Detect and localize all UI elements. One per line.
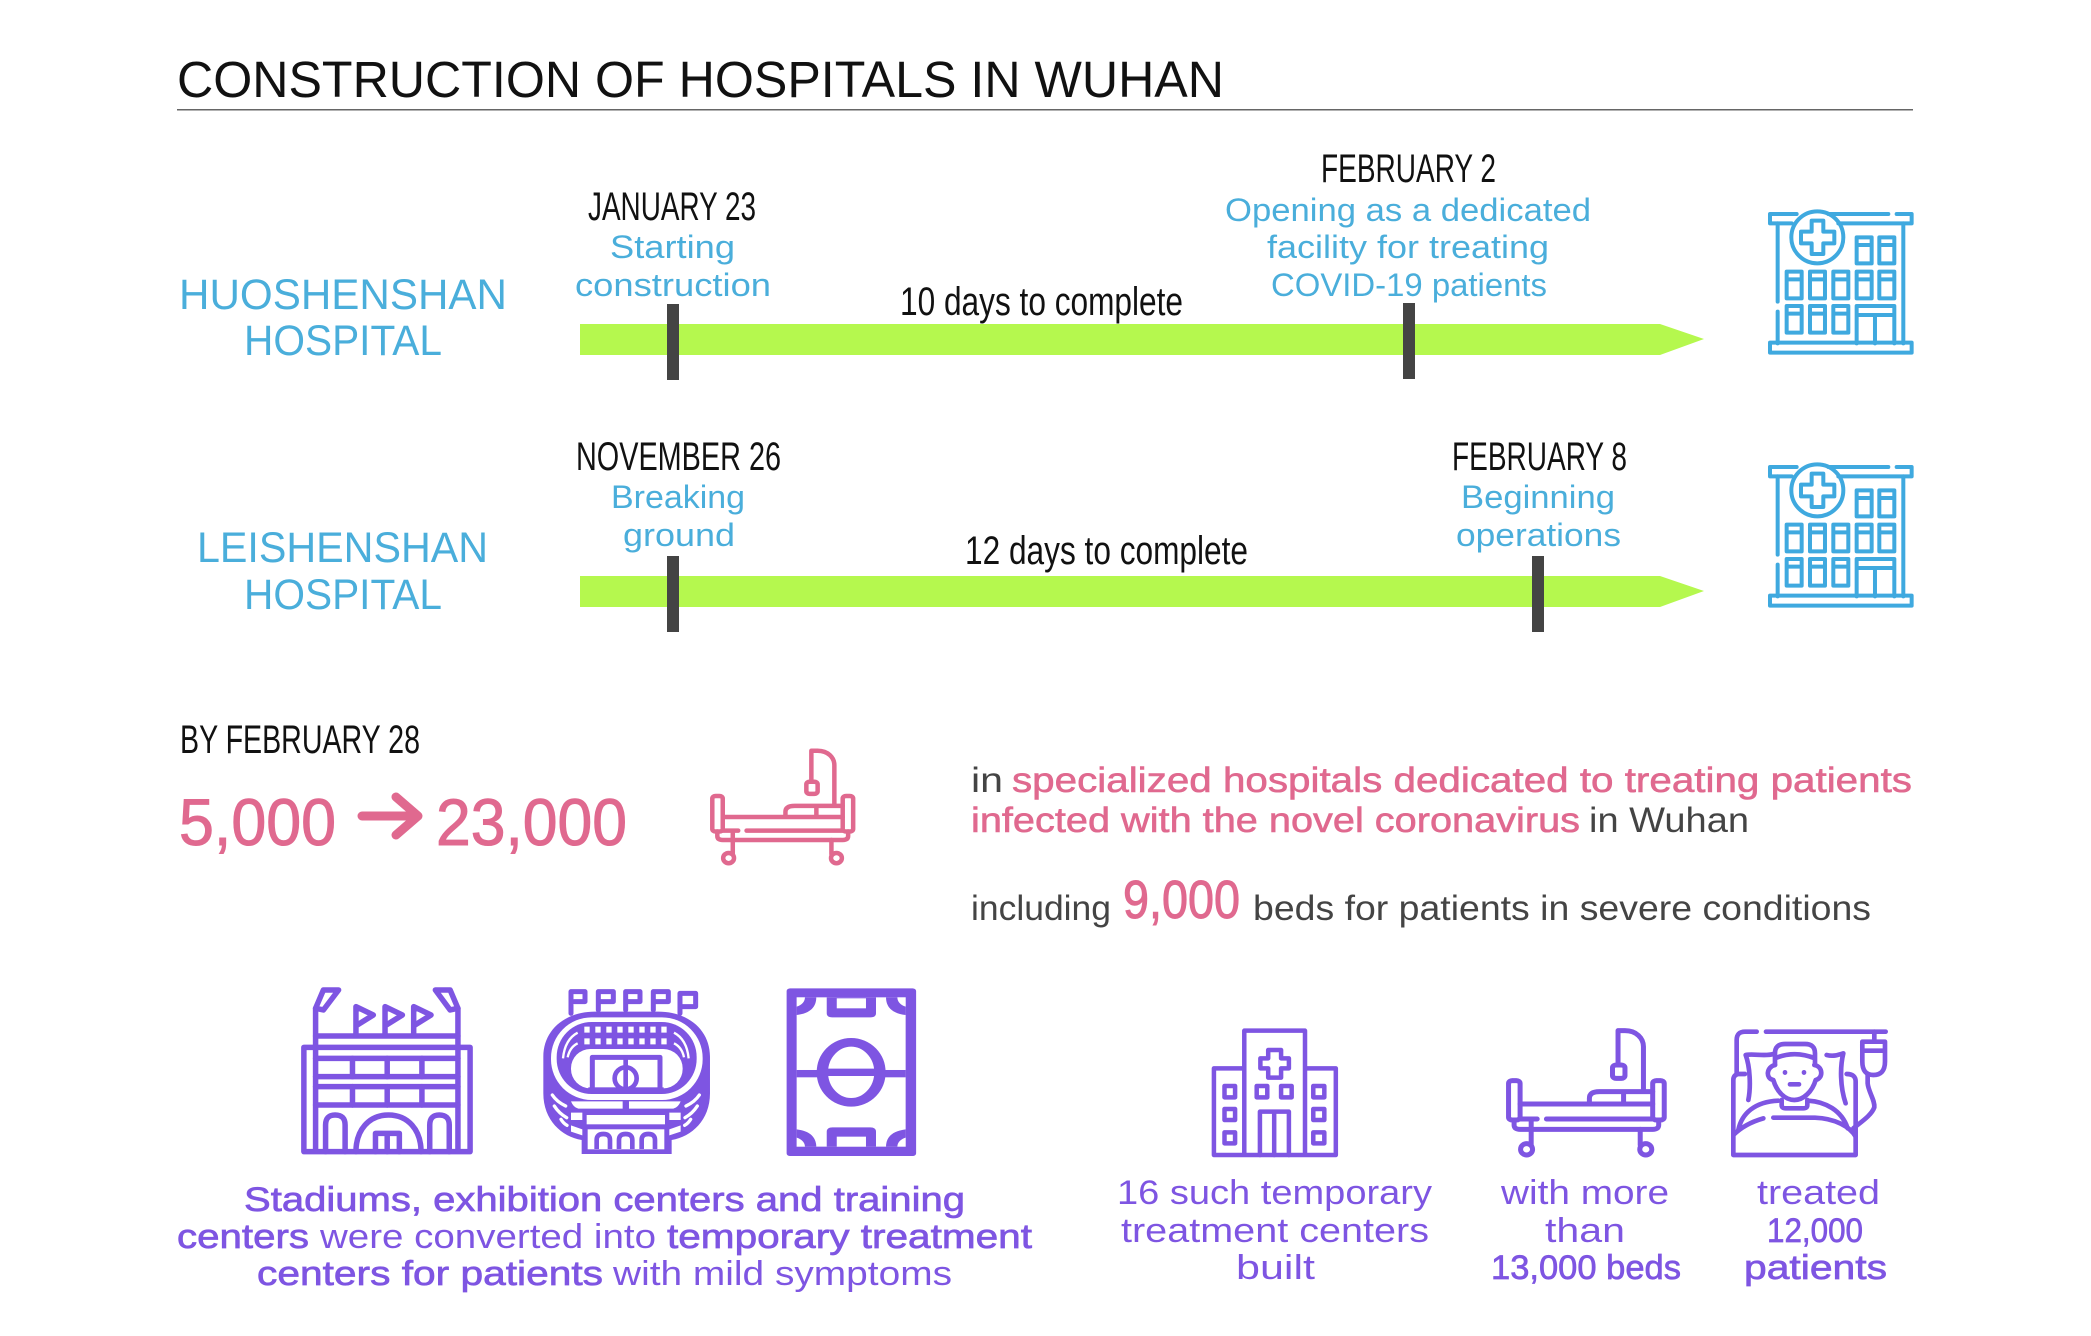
hospital name: Huoshenshan: HUOSHENSHAN: [179, 271, 507, 319]
panel: Leishenshan timeline: [197, 435, 1912, 632]
start date: [575, 185, 771, 303]
start date: ground: [623, 517, 735, 553]
description: centers for patients: [257, 1255, 603, 1293]
caption: centers: 16 such temporary: [1117, 1174, 1432, 1212]
caption: centers: built: [1236, 1249, 1316, 1287]
icon: exhibition building with flags: [304, 990, 470, 1152]
panel: Huoshenshan timeline: [179, 147, 1912, 380]
caption: beds: than: [1545, 1212, 1625, 1250]
caption: beds: [1491, 1174, 1681, 1287]
caption: centers: [1117, 1174, 1432, 1287]
description: with mild symptoms: [612, 1255, 952, 1293]
hospital name: Leishenshan: [197, 524, 488, 619]
timeline arrow: [580, 324, 1704, 355]
start tick: [667, 556, 679, 632]
bed count before: 5,000: [179, 785, 336, 859]
timeline arrow: [580, 576, 1704, 607]
duration: 10 days to complete: [900, 280, 1183, 324]
description: were converted into: [319, 1218, 656, 1256]
icon: hospital building: [1770, 464, 1912, 606]
start tick: [667, 304, 679, 380]
hospital name: Huoshenshan: HOSPITAL: [244, 317, 442, 365]
description: [971, 761, 1912, 930]
duration: 12 days to complete: [965, 529, 1248, 573]
description: specialized hospitals dedicated to treating patients: [1012, 761, 1912, 800]
bed count after: 23,000: [436, 785, 627, 859]
end date: FEBRUARY 8: [1452, 435, 1627, 479]
description: in Wuhan: [1589, 801, 1749, 840]
end date: [1452, 435, 1627, 553]
caption: patients: [1744, 1174, 1887, 1287]
start date: [576, 435, 781, 553]
icon: hospital bed: [712, 751, 853, 863]
end date: facility for treating: [1267, 229, 1549, 265]
icon: hospital: [1214, 1031, 1336, 1155]
description: 9,000: [1123, 870, 1240, 930]
end tick: [1532, 556, 1544, 632]
icon: hospital bed: [1509, 1031, 1664, 1155]
description: Stadiums, exhibition centers and training: [244, 1181, 965, 1219]
hospital name: Leishenshan: LEISHENSHAN: [197, 524, 488, 572]
end date: Beginning: [1461, 479, 1615, 515]
title: CONSTRUCTION OF HOSPITALS IN WUHAN: [177, 51, 1224, 108]
date heading: BY FEBRUARY 28: [180, 718, 420, 762]
caption: centers: treatment centers: [1121, 1212, 1429, 1250]
description: beds for patients in severe conditions: [1253, 889, 1871, 928]
end date: operations: [1456, 517, 1621, 553]
hospital name: Huoshenshan: [179, 271, 507, 365]
end date: FEBRUARY 2: [1321, 147, 1496, 191]
icon: football field: [787, 988, 916, 1156]
start date: JANUARY 23: [588, 185, 756, 229]
end tick: [1403, 303, 1415, 379]
description: [177, 1181, 1033, 1293]
icon: stadium: [543, 992, 710, 1154]
panel: temporary treatment centers: [177, 988, 1033, 1293]
arrow: [362, 797, 418, 835]
caption: patients: treated: [1757, 1174, 1880, 1212]
start date: NOVEMBER 26: [576, 435, 781, 479]
caption: beds: with more: [1500, 1174, 1669, 1212]
end date: COVID-19 patients: [1271, 267, 1547, 303]
description: in: [971, 761, 1003, 800]
start date: Starting: [610, 229, 735, 265]
caption: patients: 12,000: [1767, 1212, 1863, 1250]
description: including: [971, 889, 1111, 928]
end date: [1225, 147, 1591, 303]
hospital name: Leishenshan: HOSPITAL: [244, 571, 442, 619]
start date: Breaking: [611, 479, 745, 515]
description: temporary treatment: [667, 1218, 1033, 1256]
caption: patients: patients: [1744, 1249, 1887, 1287]
icon: hospital building: [1770, 211, 1912, 353]
start date: construction: [575, 267, 771, 303]
panel: bed numbers: [179, 718, 1912, 930]
icon: patient in bed: [1733, 1032, 1886, 1155]
description: centers: [177, 1218, 309, 1256]
caption: beds: 13,000 beds: [1491, 1249, 1681, 1287]
panel: temporary center statistics: [1117, 1031, 1887, 1287]
description: infected with the novel coronavirus: [971, 801, 1580, 840]
end date: Opening as a dedicated: [1225, 192, 1591, 228]
